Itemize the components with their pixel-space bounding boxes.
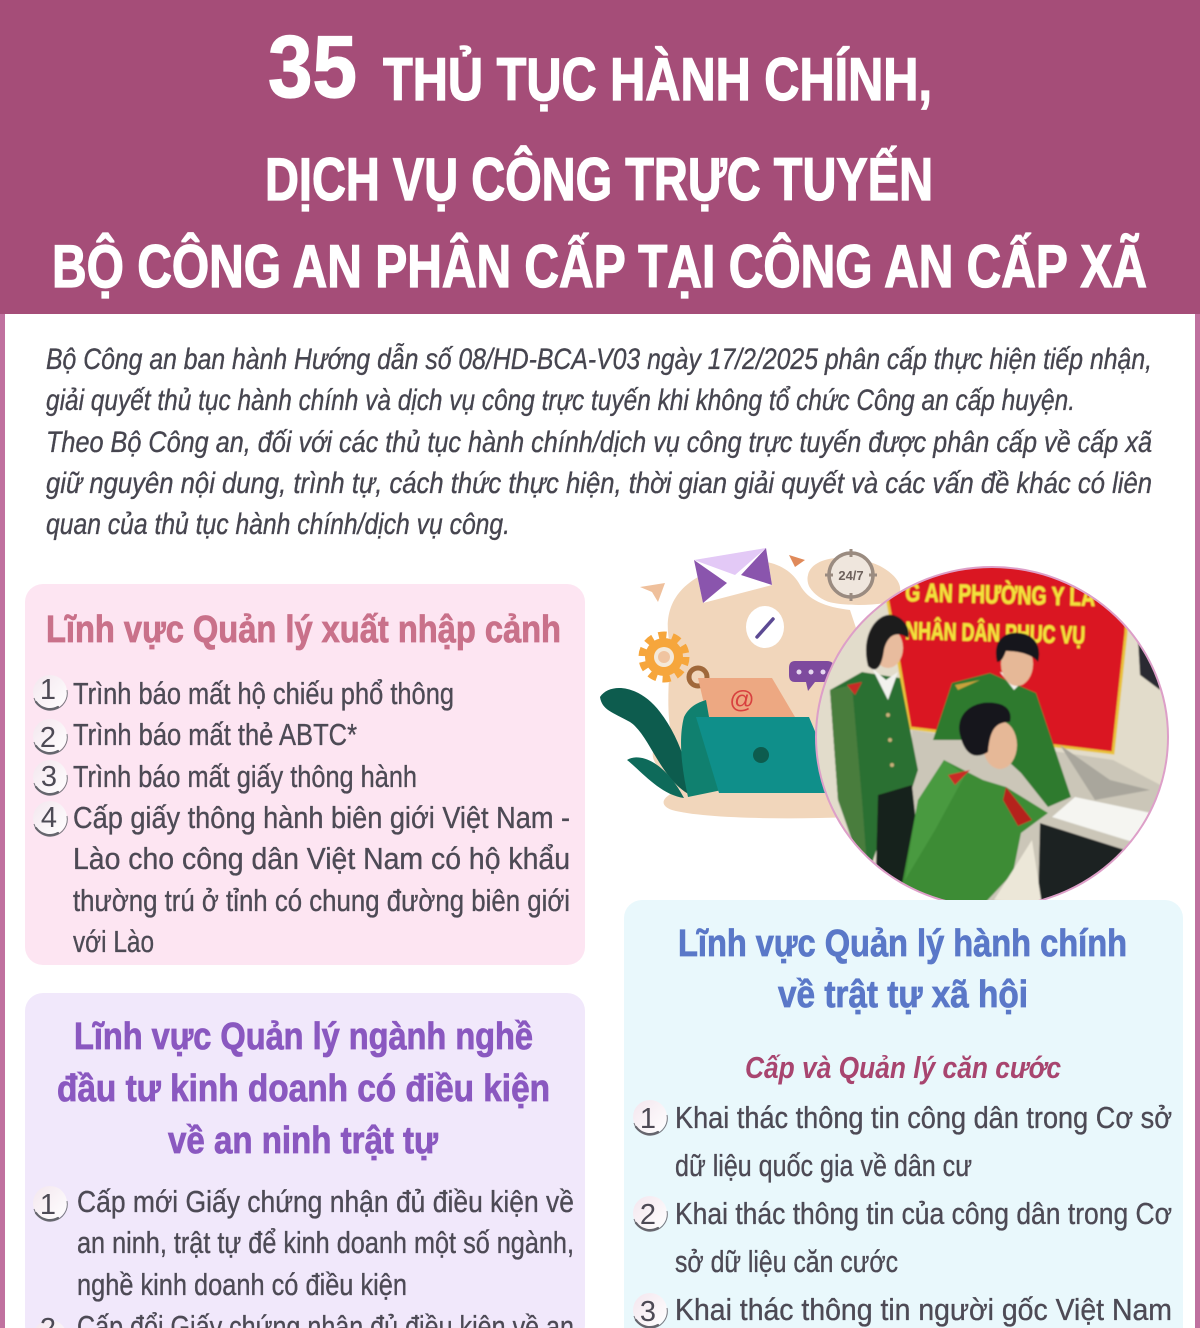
badge 1: 1 bbox=[40, 674, 56, 706]
badge 1 bbox=[33, 674, 67, 710]
heading: administrative order bbox=[678, 923, 1127, 1016]
heading: border control: Lĩnh vực Quản lý xuất nhập cảnh bbox=[46, 609, 561, 651]
icon: paper with at sign bbox=[698, 678, 795, 717]
monitor and papers bbox=[1038, 823, 1125, 905]
panel: conditional business bbox=[25, 993, 585, 1328]
title line 2: DỊCH VỤ CÔNG TRỰC TUYẾN bbox=[265, 146, 933, 213]
officer: seated man bbox=[898, 760, 1048, 905]
heading: administrative order: về trật tự xã hội bbox=[778, 974, 1028, 1016]
icon: laptop bbox=[696, 717, 830, 793]
badge 3: 3 bbox=[640, 1296, 656, 1328]
icon: chat bubble bbox=[789, 661, 834, 691]
panel: border control bbox=[25, 584, 585, 965]
badge 2 bbox=[33, 1313, 67, 1328]
officer: woman left bbox=[830, 672, 918, 880]
item 1: an ninh, trật tự để kinh doanh một số ngành, bbox=[77, 1225, 574, 1260]
item 1: Trình báo mất hộ chiếu phổ thông bbox=[73, 676, 454, 711]
heading: conditional business: về an ninh trật tự bbox=[168, 1120, 438, 1162]
title line 1: THỦ TỤC HÀNH CHÍNH, bbox=[383, 46, 932, 113]
icon: paper planes bbox=[640, 555, 805, 602]
icon: leaves bbox=[600, 688, 722, 798]
icon: envelope bbox=[694, 548, 772, 603]
title number 35: 35 bbox=[268, 17, 357, 116]
heading: conditional business: đầu tư kinh doanh có điều kiện bbox=[57, 1068, 550, 1110]
icon: gears bbox=[642, 635, 707, 686]
item 1: Cấp mới Giấy chứng nhận đủ điều kiện về bbox=[77, 1184, 574, 1219]
item 1 bbox=[675, 1100, 1172, 1183]
badge 1: 1 bbox=[640, 1103, 656, 1135]
intro text block bbox=[46, 343, 1152, 541]
badge 1 bbox=[633, 1100, 667, 1135]
icon: paper with at sign: @ bbox=[729, 686, 755, 714]
item 2 bbox=[675, 1196, 1172, 1279]
badge 2 bbox=[633, 1196, 667, 1231]
badge 2 bbox=[33, 719, 67, 754]
badge 2: 2 bbox=[640, 1199, 656, 1231]
badge 3: 3 bbox=[41, 761, 57, 793]
red banner bbox=[880, 560, 1130, 753]
photo: police officers at work bbox=[810, 560, 1175, 910]
badge 3 bbox=[33, 760, 67, 795]
heading: conditional business: Lĩnh vực Quản lý ngành nghề bbox=[74, 1016, 533, 1058]
title banner bbox=[0, 0, 1200, 314]
item 3: Trình báo mất giấy thông hành bbox=[73, 759, 417, 794]
clock blob bbox=[807, 558, 900, 605]
subheading: ID cards: Cấp và Quản lý căn cước bbox=[745, 1050, 1061, 1085]
desk clutter bbox=[912, 730, 1170, 905]
photo: police officers at work: NHÂN DÂN PHỤC VỤ bbox=[905, 615, 1086, 650]
badge 2: 2 bbox=[40, 722, 56, 754]
badge 1 bbox=[33, 1186, 67, 1221]
intro text block: quan của thủ tục hành chính/dịch vụ công. bbox=[46, 508, 510, 541]
item 1 bbox=[77, 1184, 574, 1302]
icon: wrench bubble bbox=[746, 606, 784, 648]
heading: conditional business bbox=[57, 1016, 550, 1162]
badge 4 bbox=[33, 801, 67, 836]
badge 1: 1 bbox=[40, 1189, 56, 1221]
badge 4: 4 bbox=[41, 802, 57, 834]
item 4: Lào cho công dân Việt Nam có hộ khẩu bbox=[73, 841, 570, 876]
badge 3 bbox=[633, 1293, 667, 1328]
item 2: Trình báo mất thẻ ABTC* bbox=[73, 717, 357, 752]
heading: administrative order: Lĩnh vực Quản lý hành chính bbox=[678, 923, 1127, 965]
item 1: dữ liệu quốc gia về dân cư bbox=[675, 1148, 972, 1183]
item 4 bbox=[73, 800, 570, 959]
banner text: G AN PHƯỜNG Y LA bbox=[905, 577, 1096, 612]
illustration: online services bbox=[600, 548, 900, 818]
item 1: nghề kinh doanh có điều kiện bbox=[77, 1267, 407, 1302]
item 4: Cấp giấy thông hành biên giới Việt Nam - bbox=[73, 800, 570, 835]
panel: administrative order bbox=[624, 900, 1183, 1328]
item 2: sở dữ liệu căn cước bbox=[675, 1244, 898, 1279]
item 4: với Lào bbox=[73, 924, 154, 959]
icon: clock 24/7: 24/7 bbox=[838, 568, 864, 583]
item 4: thường trú ở tỉnh có chung đường biên giới bbox=[73, 883, 570, 918]
icon: clock 24/7 bbox=[825, 549, 877, 601]
officer: standing man bbox=[933, 673, 1071, 807]
